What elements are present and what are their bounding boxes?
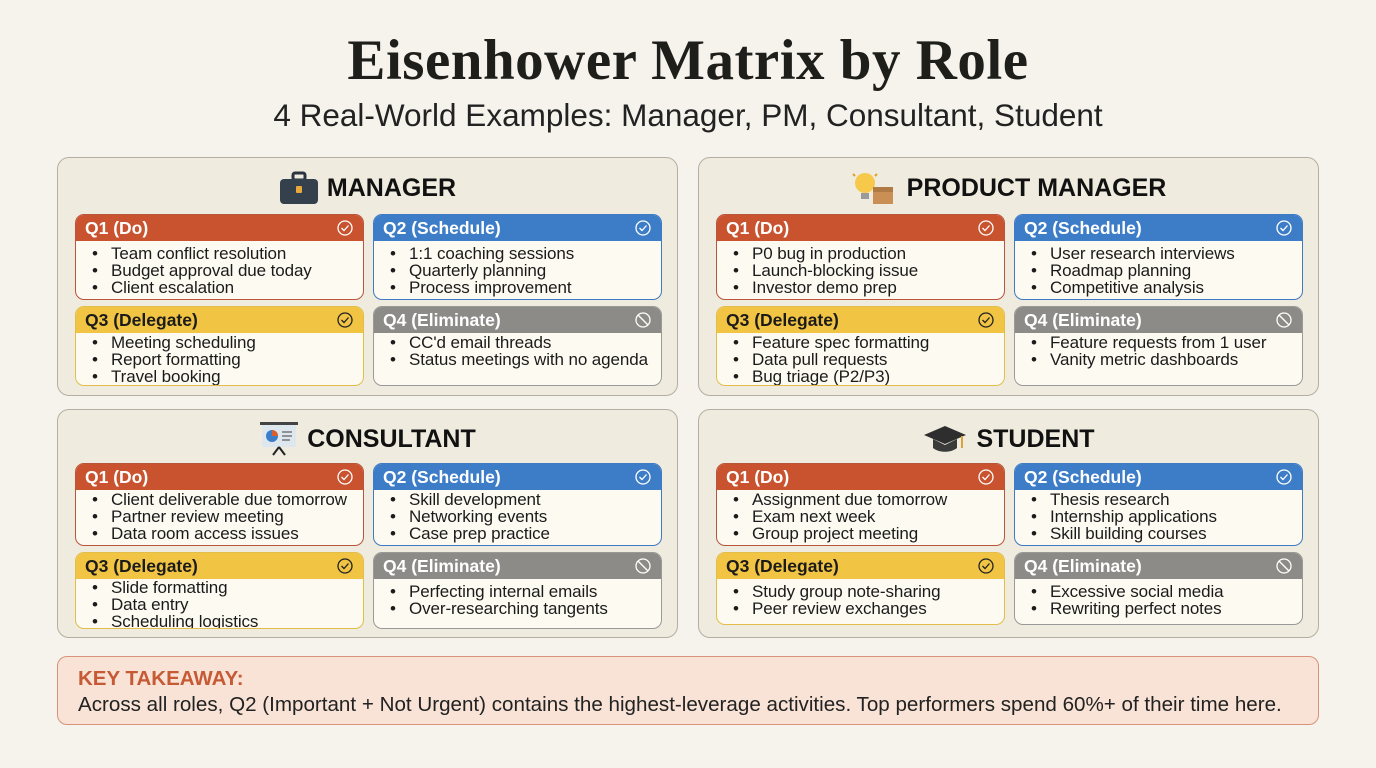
Q1: Exam next week <box>752 507 875 526</box>
Q4: Feature requests from 1 user <box>1050 333 1266 352</box>
Q4: Excessive social media <box>1050 582 1224 601</box>
Q2: Q2 (Schedule) <box>1024 218 1142 238</box>
Q2: Internship applications <box>1050 507 1217 526</box>
Q1: Client escalation <box>111 278 234 297</box>
Q1: Q1 (Do) <box>85 218 148 238</box>
Q3: Q3 (Delegate) <box>85 310 198 330</box>
Q2: Skill building courses <box>1050 524 1207 543</box>
callout: key takeaway <box>57 656 1319 725</box>
Q1: Q1 (Do) <box>726 218 789 238</box>
Q3: Q3 (Delegate) <box>726 556 839 576</box>
Q2 <box>1014 463 1303 546</box>
Q4 <box>1014 552 1303 625</box>
Q4: Q4 (Eliminate) <box>383 310 501 330</box>
heading: manager <box>280 172 456 204</box>
Q1: Q1 (Do) <box>85 467 148 487</box>
Q2: Process improvement <box>409 278 572 297</box>
Q2 <box>373 463 662 546</box>
Q2: 1:1 coaching sessions <box>409 244 574 263</box>
Q2: Skill development <box>409 490 541 509</box>
heading: product manager: PRODUCT MANAGER <box>907 174 1166 202</box>
panel: product manager <box>698 157 1319 396</box>
Q4: Perfecting internal emails <box>409 582 597 601</box>
Q2 <box>373 214 662 300</box>
Q4: CC'd email threads <box>409 333 551 352</box>
Q3: Peer review exchanges <box>752 599 927 618</box>
panel: manager <box>57 157 678 396</box>
Q1: Data room access issues <box>111 524 299 543</box>
subtitle: 4 Real-World Examples: Manager, PM, Consultant, Student <box>273 97 1103 133</box>
Q2: Roadmap planning <box>1050 261 1191 280</box>
panel: student <box>698 409 1319 638</box>
Q3: Data pull requests <box>752 350 887 369</box>
heading: manager: MANAGER <box>327 174 456 202</box>
Q3: Slide formatting <box>111 578 228 597</box>
Q3: Q3 (Delegate) <box>726 310 839 330</box>
Q4 <box>373 306 662 386</box>
Q1: Investor demo prep <box>752 278 897 297</box>
Q1: Launch-blocking issue <box>752 261 918 280</box>
Q3 <box>716 552 1005 625</box>
Q3 <box>75 306 364 386</box>
Q1: Budget approval due today <box>111 261 312 280</box>
Q4 <box>373 552 662 629</box>
Q1: Team conflict resolution <box>111 244 286 263</box>
Q3: Bug triage (P2/P3) <box>752 367 890 386</box>
Q1: Group project meeting <box>752 524 918 543</box>
heading: student <box>924 424 1095 452</box>
Q3: Study group note-sharing <box>752 582 941 601</box>
panel: consultant <box>57 409 678 638</box>
Q2: Q2 (Schedule) <box>383 218 501 238</box>
Q2: Q2 (Schedule) <box>383 467 501 487</box>
Q2: User research interviews <box>1050 244 1235 263</box>
Q2: Quarterly planning <box>409 261 546 280</box>
Q2: Thesis research <box>1050 490 1169 509</box>
Q4: Over-researching tangents <box>409 599 608 618</box>
Q3: Meeting scheduling <box>111 333 256 352</box>
Q3: Feature spec formatting <box>752 333 929 352</box>
callout: key takeaway: Across all roles, Q2 (Important + Not Urgent) contains the highest-leverage activities. Top performers spend 60%+ of their time here. <box>78 693 1282 716</box>
Q2: Case prep practice <box>409 524 550 543</box>
Q1 <box>716 463 1005 546</box>
heading: consultant: CONSULTANT <box>307 424 476 452</box>
Q1 <box>75 214 364 300</box>
heading: consultant <box>260 422 476 456</box>
Q3: Data entry <box>111 595 188 614</box>
Q2: Q2 (Schedule) <box>1024 467 1142 487</box>
Q3: Q3 (Delegate) <box>85 556 198 576</box>
Q4: Q4 (Eliminate) <box>1024 310 1142 330</box>
Q4: Q4 (Eliminate) <box>383 556 501 576</box>
Q2: Competitive analysis <box>1050 278 1204 297</box>
callout: key takeaway: KEY TAKEAWAY: <box>78 667 244 690</box>
Q4: Vanity metric dashboards <box>1050 350 1238 369</box>
Q1: Q1 (Do) <box>726 467 789 487</box>
Q4: Q4 (Eliminate) <box>1024 556 1142 576</box>
Q1: Partner review meeting <box>111 507 284 526</box>
Q3: Travel booking <box>111 367 220 386</box>
Q4 <box>1014 306 1303 386</box>
Q1: P0 bug in production <box>752 244 906 263</box>
Q1: Assignment due tomorrow <box>752 490 947 509</box>
Q1 <box>75 463 364 546</box>
heading: student: STUDENT <box>976 424 1095 452</box>
Q1: Client deliverable due tomorrow <box>111 490 347 509</box>
Q4: Status meetings with no agenda <box>409 350 648 369</box>
Q3 <box>716 306 1005 386</box>
Q1 <box>716 214 1005 300</box>
Q2: Networking events <box>409 507 547 526</box>
Q4: Rewriting perfect notes <box>1050 599 1222 618</box>
title: Eisenhower Matrix by Role <box>347 29 1029 92</box>
Q3: Report formatting <box>111 350 241 369</box>
Q3 <box>75 552 364 629</box>
Q2 <box>1014 214 1303 300</box>
